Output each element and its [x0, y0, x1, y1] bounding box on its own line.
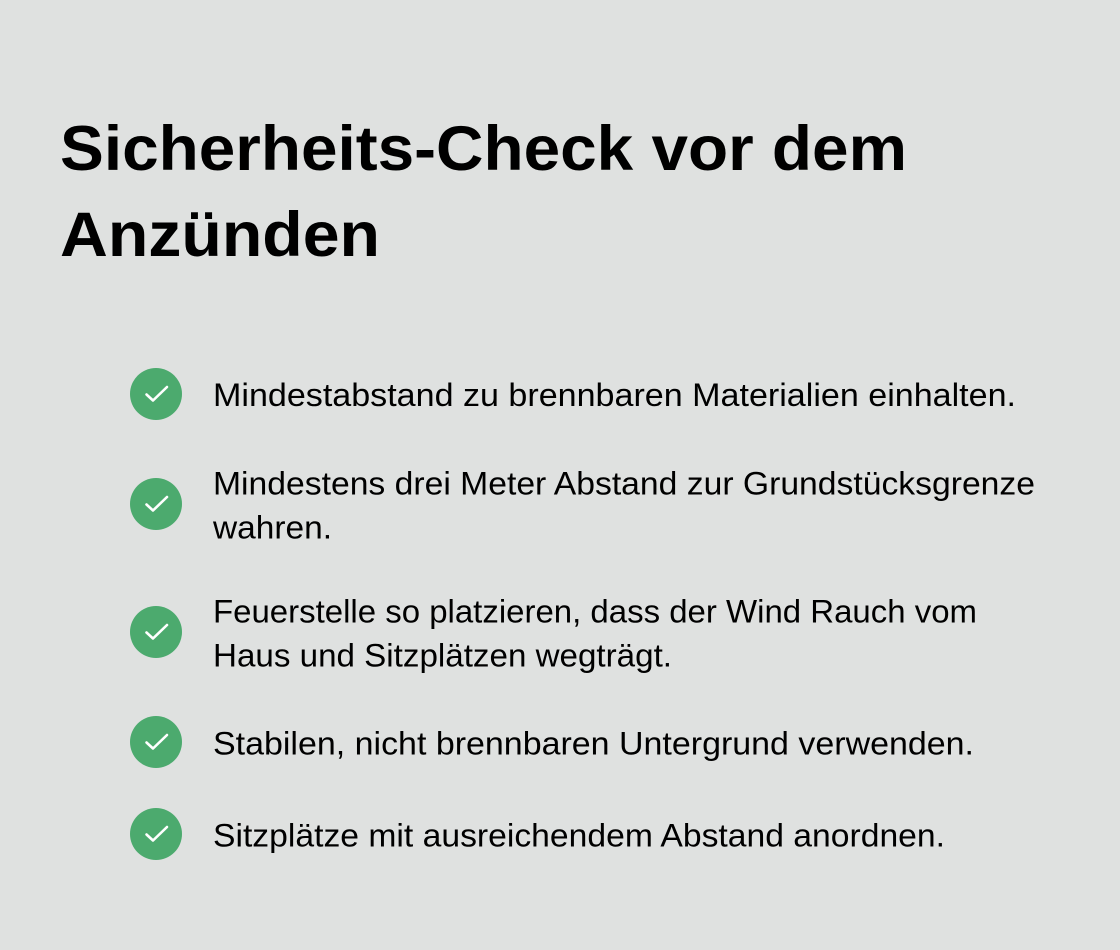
checklist	[130, 368, 1035, 860]
item 3: Haus und Sitzplätzen wegträgt.	[213, 638, 672, 674]
item 2	[130, 466, 1035, 546]
item 3	[130, 594, 977, 674]
item 4	[130, 716, 974, 768]
item 2: wahren.	[212, 510, 332, 546]
item 2: Mindestens drei Meter Abstand zur Grundstücksgrenze	[213, 466, 1035, 502]
title: Anzünden	[60, 200, 380, 270]
item 1: Mindestabstand zu brennbaren Materialien einhalten.	[213, 377, 1016, 413]
item 4: Stabilen, nicht brennbaren Untergrund verwenden.	[213, 726, 974, 762]
title: Sicherheits-Check vor dem	[60, 114, 907, 184]
item 1	[130, 368, 1016, 420]
item 5	[130, 808, 945, 860]
item 5: Sitzplätze mit ausreichendem Abstand anordnen.	[213, 818, 945, 854]
item 3: Feuerstelle so platzieren, dass der Wind Rauch vom	[213, 594, 977, 630]
title	[60, 114, 907, 270]
